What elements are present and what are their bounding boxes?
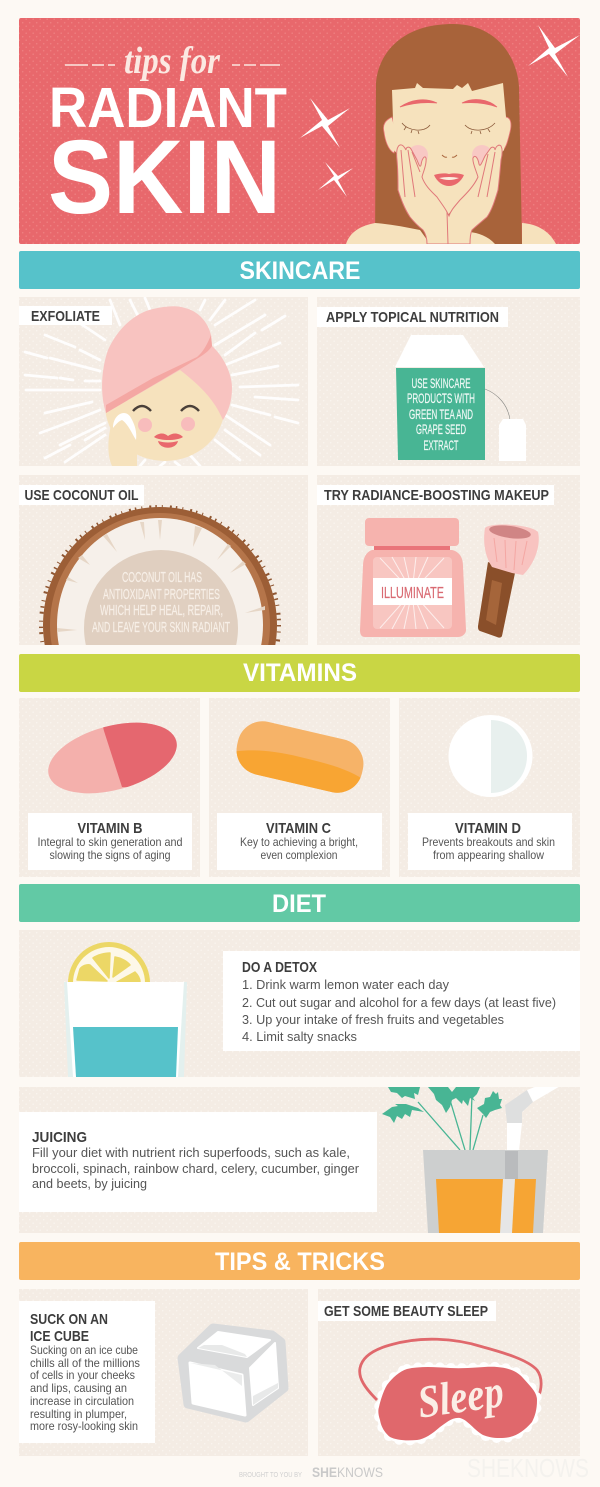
icon: makeup brush xyxy=(478,523,539,638)
ice cube text box: resulting in plumper, xyxy=(30,1407,127,1421)
section header: vitamins: VITAMINS xyxy=(243,659,357,687)
vitamin d text box: VITAMIN D xyxy=(455,820,521,837)
icon: vitamin c capsule xyxy=(236,721,364,793)
label: exfoliate: EXFOLIATE xyxy=(31,308,100,325)
juicing text box xyxy=(19,1112,377,1212)
tea bag text: GRAPE SEED xyxy=(416,421,466,437)
panel: vitamin c xyxy=(209,698,390,877)
coconut text xyxy=(92,569,230,636)
panel: juicing xyxy=(19,1085,580,1233)
coconut text: AND LEAVE YOUR SKIN RADIANT xyxy=(92,619,230,636)
section header: skincare xyxy=(19,251,580,289)
icon: ice cube xyxy=(182,1328,284,1418)
section header: vitamins xyxy=(19,654,580,692)
footer credit xyxy=(239,1464,383,1480)
section header: tips and tricks: TIPS & TRICKS xyxy=(215,1248,385,1276)
section header: tips and tricks xyxy=(19,1242,580,1280)
juicing text box: and beets, by juicing xyxy=(32,1176,147,1191)
label: use coconut oil: USE COCONUT OIL xyxy=(24,487,138,504)
footer credit: SHEKNOWS xyxy=(312,1464,383,1480)
section header: skincare: SKINCARE xyxy=(240,257,360,285)
icon: illuminate jar xyxy=(360,518,466,637)
vitamin c text box xyxy=(217,813,382,870)
vitamin d text box: from appearing shallow xyxy=(433,848,544,862)
panel: topical nutrition xyxy=(317,297,580,466)
juicing text box: broccoli, spinach, rainbow chard, celery, cucumber, ginger xyxy=(32,1161,360,1176)
vitamin c text box: Key to achieving a bright, xyxy=(240,835,358,849)
ice cube text box xyxy=(19,1301,155,1443)
panel: exfoliate xyxy=(19,297,308,466)
title: tips for: tips for xyxy=(124,40,221,82)
ice cube text box: and lips, causing an xyxy=(30,1381,127,1395)
panel: beauty sleep xyxy=(318,1289,580,1456)
vitamin c text box: even complexion xyxy=(260,848,338,862)
icon: tea bag xyxy=(395,335,526,461)
icon: sleep mask xyxy=(360,1339,541,1440)
vitamin b text box xyxy=(28,813,192,870)
panel: vitamin d xyxy=(399,698,580,877)
label: get some beauty sleep: GET SOME BEAUTY SLEEP xyxy=(324,1303,488,1320)
vitamin b text box: Integral to skin generation and xyxy=(38,835,182,849)
icon: vitamin b pill xyxy=(48,722,177,794)
title: radiant skin: RADIANT xyxy=(49,76,287,140)
coconut text: WHICH HELP HEAL, REPAIR, xyxy=(100,602,223,619)
juicing text box: JUICING xyxy=(32,1129,87,1146)
detox text box: 1. Drink warm lemon water each day xyxy=(242,977,449,992)
ice cube text box: chills all of the millions xyxy=(30,1356,140,1370)
illustration: woman in towel xyxy=(102,306,232,466)
tea bag text: PRODUCTS WITH xyxy=(407,390,475,406)
coconut text: COCONUT OIL HAS xyxy=(122,569,202,586)
illustration: woman touching her face xyxy=(346,24,556,244)
tea bag text: GREEN TEA AND xyxy=(409,406,473,422)
ice cube text box: of cells in your cheeks xyxy=(30,1368,135,1382)
ice cube text box: more rosy-looking skin xyxy=(30,1419,138,1433)
hero banner xyxy=(19,18,580,244)
icon: coconut xyxy=(39,505,281,645)
panel: do a detox xyxy=(19,930,580,1077)
hands xyxy=(397,145,502,244)
vitamin c text box: VITAMIN C xyxy=(266,820,331,837)
icon: lemon water glass xyxy=(64,942,187,1077)
tea bag text: USE SKINCARE xyxy=(412,375,470,391)
section header: diet xyxy=(19,884,580,922)
ice cube text box: ICE CUBE xyxy=(30,1328,89,1345)
vitamin d text box: Prevents breakouts and skin xyxy=(422,835,555,849)
tea bag text: EXTRACT xyxy=(424,437,459,453)
label: try radiance-boosting makeup: TRY RADIANCE-BOOSTING MAKEUP xyxy=(324,487,549,504)
detox text box: 2. Cut out sugar and alcohol for a few days (at least five) xyxy=(242,995,556,1010)
ice cube text box: increase in circulation xyxy=(30,1394,134,1408)
icon: sleep mask: Sleep xyxy=(414,1365,507,1428)
vitamin d text box xyxy=(408,813,572,870)
icon: juice glass with greens and straw xyxy=(382,1085,562,1233)
label: apply topical nutrition: APPLY TOPICAL NUTRITION xyxy=(326,309,499,326)
ice cube text box: SUCK ON AN xyxy=(30,1311,108,1328)
panel: coconut oil xyxy=(19,475,308,645)
icon: illuminate jar: ILLUMINATE xyxy=(381,585,444,602)
ice cube text box: Sucking on an ice cube xyxy=(30,1343,138,1357)
panel: ice cube xyxy=(19,1289,308,1456)
icon: sparkles xyxy=(300,25,580,197)
title: radiant skin: SKIN xyxy=(48,119,281,236)
footer credit: BROUGHT TO YOU BY xyxy=(239,1472,302,1479)
coconut text: ANTIOXIDANT PROPERTIES xyxy=(103,586,220,603)
detox text box: 3. Up your intake of fresh fruits and vegetables xyxy=(242,1012,504,1027)
panel: vitamin b xyxy=(19,698,200,877)
detox text box: 4. Limit salty snacks xyxy=(242,1029,357,1044)
icon: vitamin d tablet xyxy=(448,715,532,797)
tea bag text xyxy=(407,375,475,453)
juicing text box: Fill your diet with nutrient rich superfoods, such as kale, xyxy=(32,1145,350,1160)
vitamin b text box: VITAMIN B xyxy=(78,820,143,837)
section header: diet: DIET xyxy=(272,890,326,918)
sunburst rays xyxy=(25,298,298,466)
panel: makeup xyxy=(317,475,580,645)
detox text box: DO A DETOX xyxy=(242,959,317,976)
detox text box xyxy=(223,951,580,1051)
brows, eyes, cheeks, nose and lips xyxy=(400,100,497,186)
vitamin b text box: slowing the signs of aging xyxy=(50,848,170,862)
